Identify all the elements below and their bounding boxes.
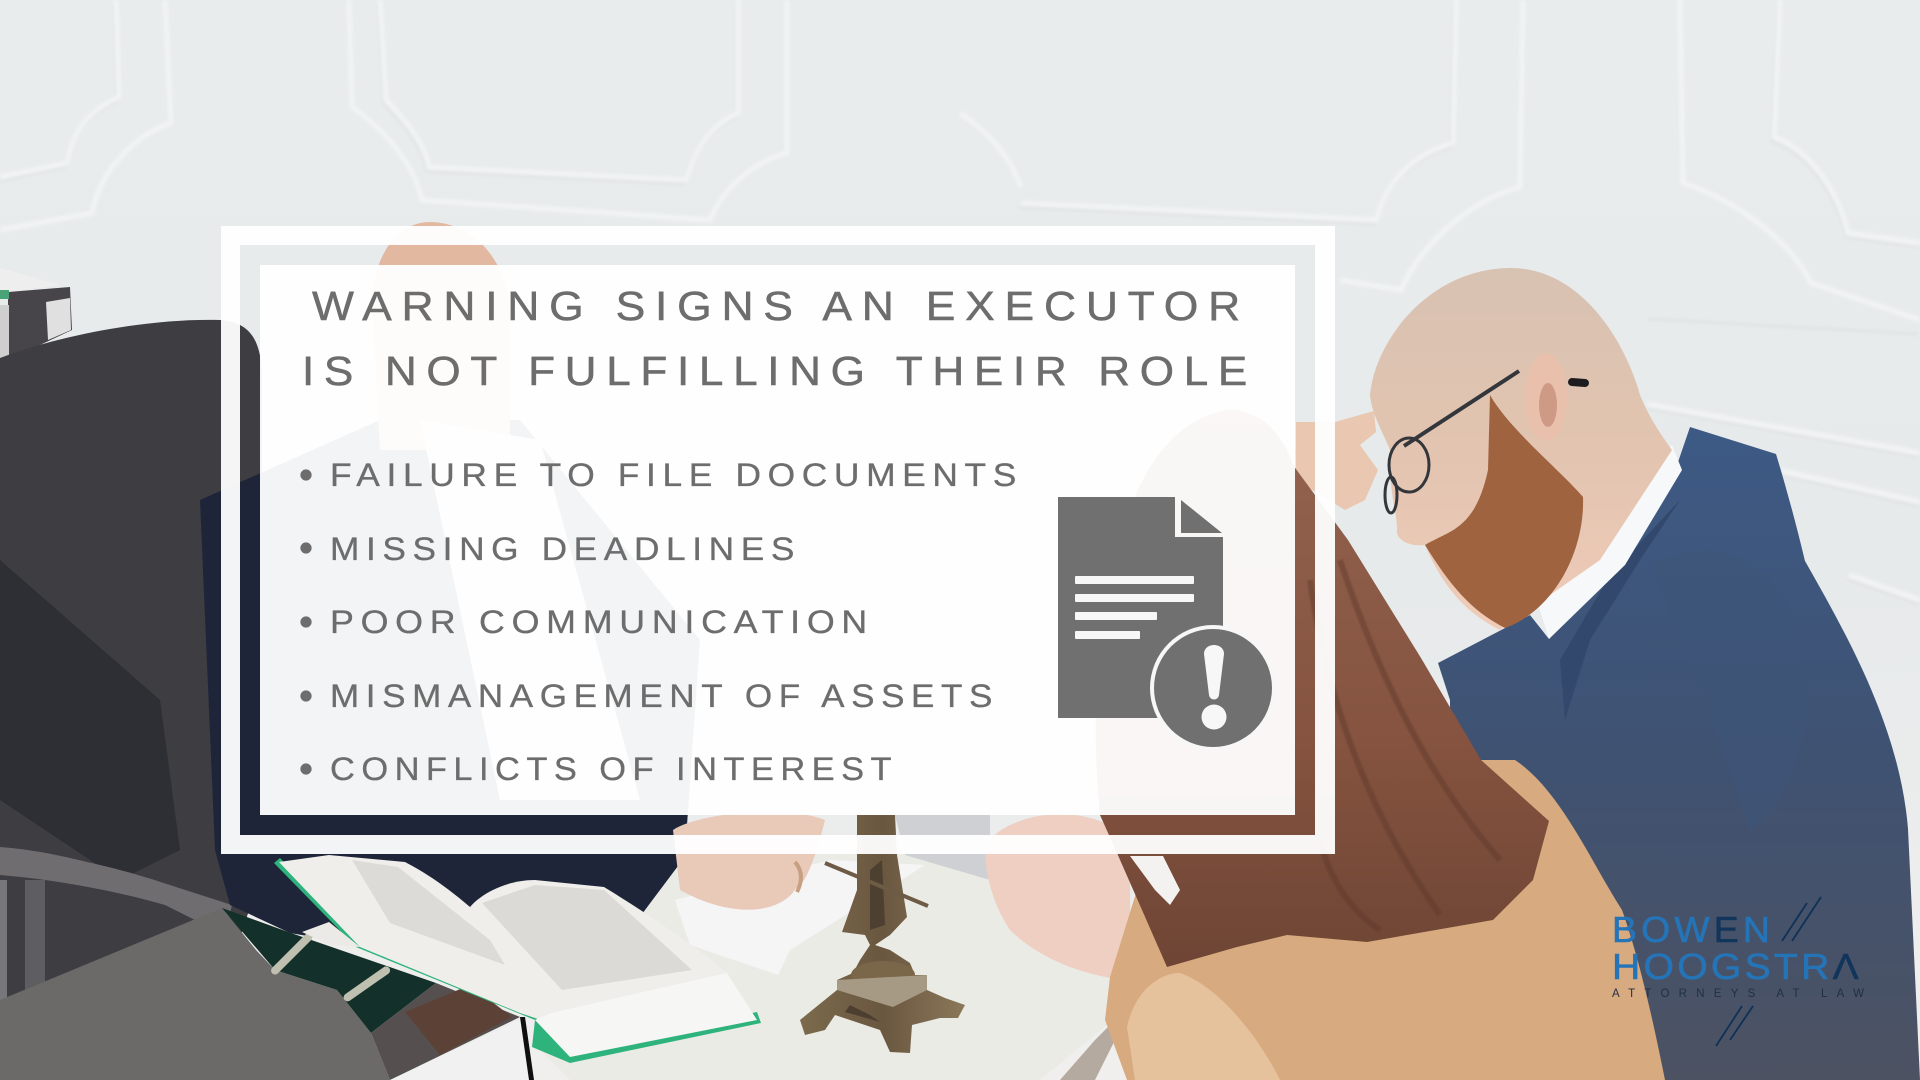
binders on shelf — [0, 268, 72, 365]
bullet: mismanagement of assets: MISMANAGEMENT OF ASSETS — [330, 678, 999, 714]
bald head and face — [1370, 268, 1672, 630]
papers on table — [675, 860, 925, 975]
logo: Bowen Hoogstra Attorneys at Law: BOWEN — [1612, 909, 1774, 950]
ear — [1525, 353, 1567, 441]
logo: Bowen Hoogstra Attorneys at Law — [1612, 897, 1864, 1046]
translucent white content panel — [260, 265, 1295, 815]
open book — [274, 855, 761, 1063]
justice statue — [800, 815, 965, 1053]
office chair — [0, 320, 262, 1010]
hand on forehead — [1296, 411, 1378, 510]
woman's back in tan top — [1105, 760, 1665, 1080]
icon: document with warning exclamation — [1058, 497, 1276, 751]
man at right in navy suit — [1296, 268, 1920, 1080]
table — [540, 850, 1135, 1080]
hair strands — [1310, 560, 1500, 930]
man at left in dark suit — [200, 222, 700, 945]
glasses — [1385, 371, 1585, 513]
woman's hands — [985, 814, 1130, 980]
logo: Bowen Hoogstra Attorneys at Law: HOOGSTR Λ — [1612, 946, 1862, 987]
red beard — [1425, 395, 1583, 628]
title: WARNING SIGNS AN EXECUTOR — [312, 283, 1250, 329]
bullet: missing deadlines: MISSING DEADLINES — [330, 531, 801, 567]
outer white frame — [221, 226, 1335, 854]
ring binder in foreground — [0, 908, 534, 1080]
bullet: failure to file documents: FAILURE TO FILE DOCUMENTS — [330, 457, 1023, 493]
bullet: poor communication: POOR COMMUNICATION — [330, 604, 874, 640]
title: IS NOT FULFILLING THEIR ROLE — [302, 348, 1257, 394]
bullet list of warning signs — [300, 457, 1023, 787]
title — [302, 283, 1257, 394]
woman's hair — [1096, 410, 1549, 967]
logo: Bowen Hoogstra Attorneys at Law: ATTORNEYS AT LAW — [1612, 988, 1864, 1000]
laptop edge — [895, 815, 990, 880]
man's left hand with ring — [673, 812, 825, 910]
bullet: conflicts of interest: CONFLICTS OF INTEREST — [330, 751, 898, 787]
